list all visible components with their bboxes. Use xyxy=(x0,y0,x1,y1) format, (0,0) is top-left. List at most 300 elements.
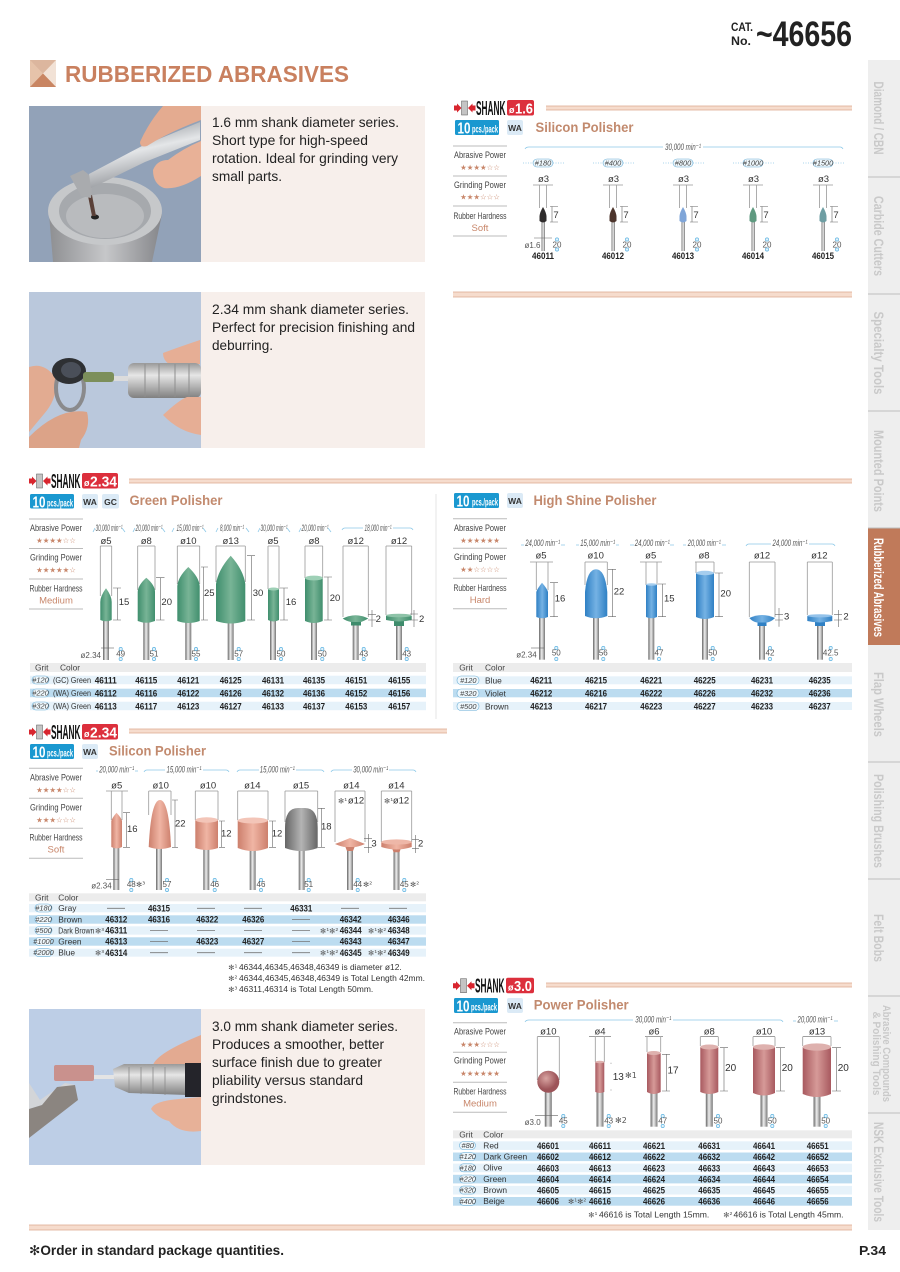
tool 46631: ø8 xyxy=(704,1026,715,1037)
table: silicon polisher part numbers: 46313 xyxy=(105,937,127,948)
table: power polisher part numbers: 46653 xyxy=(807,1163,829,1174)
table: power polisher part numbers: #400 xyxy=(459,1197,477,1206)
photo: handpiece over metal cup xyxy=(29,106,201,262)
tool 46641: ø10 xyxy=(756,1026,772,1037)
table: silicon polisher part numbers: 46311 xyxy=(105,926,128,937)
tool 46014: 46014 xyxy=(742,251,765,262)
tool 46601 xyxy=(525,1026,568,1128)
tool 46346: ø12 xyxy=(393,795,409,806)
tool 46125 xyxy=(216,536,263,661)
tool 46342: ø12 xyxy=(348,795,364,806)
shank logo 2.34: ø xyxy=(84,729,90,739)
speed labels: 8,000 min⁻¹ xyxy=(220,523,244,533)
tool 46641: 50 xyxy=(768,1116,777,1126)
table: power polisher part numbers: 46644 xyxy=(753,1174,776,1185)
table: power polisher part numbers: 46654 xyxy=(807,1174,829,1185)
tool 46012: 7 xyxy=(623,210,629,221)
tool 46331: 51 xyxy=(304,880,314,889)
table: green polisher part numbers: (WA) Green xyxy=(53,701,91,711)
table: green polisher part numbers: 46157 xyxy=(388,702,410,712)
tool 46331 xyxy=(285,781,332,892)
tool 46011: #180 xyxy=(535,158,552,168)
table: power polisher part numbers: 46614 xyxy=(589,1174,612,1185)
table: power polisher part numbers: 46624 xyxy=(643,1174,666,1185)
tool 46211: ø5 xyxy=(535,550,547,561)
section: shank 2.34 silicon polisher xyxy=(29,722,426,994)
page number: P.34 xyxy=(859,1243,887,1258)
footnotes: 46344,46345,46348,46349 is diameter ø12. xyxy=(239,962,402,972)
table: high shine part numbers: Color xyxy=(485,662,505,672)
sidebar navigation tabs: Diamond / CBN xyxy=(871,82,886,154)
product name: Green Polisher xyxy=(130,492,223,508)
photo: power polisher on metal tool xyxy=(29,1009,201,1165)
table: power polisher part numbers: 46632 xyxy=(698,1152,720,1163)
product name: Power Polisher xyxy=(534,996,629,1012)
catalog number: ~46656 xyxy=(756,15,852,54)
table: green polisher part numbers: 46127 xyxy=(220,702,242,712)
speed labels: 20,000 min⁻¹ xyxy=(301,523,328,533)
tool 46326: 12 xyxy=(272,828,282,839)
tool 46631: 20 xyxy=(725,1063,737,1074)
sidebar navigation tabs: Carbide Cutters xyxy=(871,196,886,276)
tool 46014: 7 xyxy=(763,210,769,221)
table: high shine part numbers: 46236 xyxy=(809,688,831,700)
table: high shine part numbers: 46217 xyxy=(585,702,607,712)
table: power polisher part numbers: ✻¹✻² xyxy=(568,1197,586,1206)
WA badge xyxy=(507,998,523,1013)
tool 46621: 47 xyxy=(658,1116,668,1126)
speed labels: 30,000 min⁻¹ xyxy=(635,1014,671,1024)
table: silicon polisher part numbers: 46343 xyxy=(340,937,362,948)
ratings xyxy=(453,519,507,609)
pack badge xyxy=(30,744,74,762)
footnotes: 46616 is Total Length 15mm. xyxy=(599,1210,709,1220)
ratings: Soft xyxy=(48,845,65,856)
tool 46015: 46015 xyxy=(812,251,835,262)
ratings: Grinding Power xyxy=(454,552,506,562)
ratings xyxy=(29,768,83,858)
table: power polisher part numbers: #320 xyxy=(459,1186,477,1195)
tool 46011: 20 xyxy=(553,240,562,250)
ratings xyxy=(453,146,507,236)
table: power polisher part numbers: 46625 xyxy=(643,1186,666,1196)
tool 46221: 47 xyxy=(655,649,664,658)
footnotes xyxy=(228,962,425,994)
tool 46014: ø3 xyxy=(748,174,759,185)
footnotes: ✻¹ xyxy=(588,1211,597,1220)
description text: deburring. xyxy=(212,337,273,353)
table: silicon polisher part numbers: 46345 xyxy=(340,948,362,959)
table: silicon polisher part numbers: ✻¹✻² xyxy=(368,949,386,958)
table: green polisher part numbers: 46155 xyxy=(388,676,411,686)
table: power polisher part numbers: 46642 xyxy=(753,1152,775,1163)
tool 46231 xyxy=(749,550,789,661)
sidebar navigation tabs: NSK Exclusive Tools xyxy=(871,1122,886,1222)
table: power polisher part numbers: Brown xyxy=(483,1185,507,1195)
tool 46601: 45 xyxy=(559,1116,568,1126)
tool 46121: 55 xyxy=(192,650,201,659)
pack badge: pcs./pack xyxy=(472,124,498,136)
tool 46215 xyxy=(585,550,624,661)
tool 46342: 3 xyxy=(371,839,377,850)
tool 46125: 57 xyxy=(234,650,244,659)
tool 46651: 50 xyxy=(821,1116,831,1126)
table: power polisher part numbers: 46641 xyxy=(753,1141,776,1152)
ratings: ★★★☆☆☆ xyxy=(460,192,500,202)
table: high shine part numbers: 46215 xyxy=(585,676,608,686)
ratings: Rubber Hardness xyxy=(454,1086,507,1096)
tool 46013: 46013 xyxy=(672,251,694,262)
sidebar navigation tabs: Specialty Tools xyxy=(871,312,886,394)
table: high shine part numbers: Brown xyxy=(485,702,509,712)
footnotes: ✻² xyxy=(228,974,237,983)
tool 46235: 42.5 xyxy=(823,649,839,658)
description text: grindstones. xyxy=(212,1090,287,1106)
tool 46621 xyxy=(645,1026,679,1128)
table: green polisher part numbers: 46112 xyxy=(95,688,117,700)
table: green polisher part numbers: Grit xyxy=(35,662,49,672)
tool 46342: ✻¹ xyxy=(338,796,347,805)
table: silicon polisher part numbers: Gray xyxy=(58,903,77,913)
ratings: ★★☆☆☆☆ xyxy=(460,565,500,574)
table: high shine part numbers: #500 xyxy=(460,702,477,711)
shank logo 2.34: ø xyxy=(84,478,90,488)
table: power polisher part numbers: 46643 xyxy=(753,1163,775,1174)
panel: 3.0 mm intro xyxy=(29,1009,425,1165)
ratings: Grinding Power xyxy=(454,1056,506,1066)
tool 46631 xyxy=(700,1026,737,1128)
table: silicon polisher part numbers: Dark Brown xyxy=(58,925,95,935)
GC badge: GC xyxy=(104,497,117,507)
table: green polisher part numbers: 46132 xyxy=(262,688,284,700)
table: silicon polisher part numbers: 46344 xyxy=(340,926,362,937)
table: green polisher part numbers: #220 xyxy=(32,688,50,698)
table: power polisher part numbers: 46651 xyxy=(807,1141,829,1152)
table: power polisher part numbers: #180 xyxy=(459,1163,477,1172)
table: power polisher part numbers: 46645 xyxy=(753,1186,776,1196)
table: silicon polisher part numbers: Green xyxy=(58,936,82,946)
tool 46115 xyxy=(138,536,172,661)
tool 46641: 20 xyxy=(782,1063,793,1074)
table: power polisher part numbers: 46631 xyxy=(698,1141,721,1152)
tool 46121 xyxy=(177,536,215,661)
table: high shine part numbers: 46227 xyxy=(694,702,716,712)
speed label: 30,000 min⁻¹ xyxy=(665,142,701,152)
speed labels: 15,000 min⁻¹ xyxy=(166,765,202,775)
ratings xyxy=(29,519,83,609)
table: power polisher part numbers: #220 xyxy=(459,1174,477,1184)
footnotes: 46344,46345,46348,46349 is Total Length 42mm. xyxy=(239,973,425,983)
table: silicon polisher part numbers: #2000 xyxy=(33,948,55,957)
tool 46315: 57 xyxy=(163,880,172,889)
tool 46111: 15 xyxy=(119,597,129,608)
tool 46014: #1000 xyxy=(743,158,764,168)
WA badge: WA xyxy=(508,123,522,133)
table: high shine part numbers: 46226 xyxy=(694,688,716,700)
table: silicon polisher part numbers: 46348 xyxy=(388,926,410,937)
speed labels xyxy=(93,523,413,533)
ratings: Abrasive Power xyxy=(454,150,506,160)
tool 46342: 44 xyxy=(353,880,363,889)
section: high shine polisher xyxy=(453,492,852,712)
pack badge: 10 xyxy=(456,494,470,510)
table: green polisher part numbers: 46126 xyxy=(220,688,242,700)
tool 46211: 50 xyxy=(552,649,561,658)
sidebar navigation tabs: & Polishing Tools xyxy=(870,1012,882,1096)
tool 46115: 20 xyxy=(161,597,172,608)
catalog number xyxy=(731,15,852,54)
tool 46331: ø15 xyxy=(293,781,309,792)
tool 46641 xyxy=(753,1026,793,1128)
ratings: ★★★☆☆☆ xyxy=(460,1040,500,1049)
shank logo 3.0: 3.0 xyxy=(514,978,532,995)
table: high shine part numbers: 46212 xyxy=(530,688,552,700)
WA badge xyxy=(507,493,523,508)
tool 46155: ø12 xyxy=(391,536,407,547)
tool 46111: ø2.34 xyxy=(81,651,102,660)
pack badge xyxy=(454,998,498,1016)
ratings: ★★★☆☆☆ xyxy=(36,815,76,824)
tool 46221: ø5 xyxy=(645,550,656,561)
table: silicon polisher part numbers: 46315 xyxy=(148,903,171,914)
product name: Silicon Polisher xyxy=(109,743,207,759)
description text: 3.0 mm shank diameter series. xyxy=(212,1018,398,1034)
speed labels: 20,000 min⁻¹ xyxy=(797,1014,832,1024)
WA badge: WA xyxy=(83,747,97,757)
tool 46135: 50 xyxy=(318,650,327,659)
table: power polisher part numbers: 46633 xyxy=(698,1163,720,1174)
speed labels: 15,000 min⁻¹ xyxy=(176,523,204,533)
table: green polisher part numbers: 46135 xyxy=(303,676,326,686)
table: silicon polisher part numbers: 46346 xyxy=(388,914,410,926)
tool 46211: ø2.34 xyxy=(516,651,537,660)
tool 46013 xyxy=(663,158,705,262)
table: green polisher part numbers xyxy=(30,662,426,712)
table: silicon polisher part numbers: ✻¹✻² xyxy=(320,949,338,958)
tool 46331: 18 xyxy=(321,822,332,833)
tool 46611: 43 xyxy=(604,1116,614,1126)
tool 46151: 2 xyxy=(376,614,381,625)
tool 46231: 3 xyxy=(784,611,789,622)
ratings: Rubber Hardness xyxy=(30,832,83,842)
tool 46326: 46 xyxy=(257,880,266,889)
footnotes: ✻¹ xyxy=(228,963,237,972)
tool 46015: 20 xyxy=(833,240,842,250)
panel: 2.34 mm intro xyxy=(29,292,425,448)
table: silicon polisher part numbers: #180 xyxy=(35,904,53,912)
WA badge xyxy=(507,120,523,135)
footnotes xyxy=(588,1210,844,1220)
table: power polisher part numbers: Beige xyxy=(483,1196,505,1206)
catalog number: CAT. xyxy=(731,20,753,34)
table: high shine part numbers: 46237 xyxy=(809,702,831,712)
ratings: ★★★★★★ xyxy=(460,1069,500,1078)
section: shank 3.0 power polisher xyxy=(453,976,852,1220)
ratings: Abrasive Power xyxy=(454,1026,506,1036)
ratings: Grinding Power xyxy=(30,552,82,562)
table: silicon polisher part numbers: ✻¹✻² xyxy=(368,926,386,936)
tool 46015 xyxy=(803,158,845,262)
sidebar navigation tabs xyxy=(868,60,900,1230)
sidebar navigation tabs: Rubberized Abrasives xyxy=(871,538,886,637)
ratings: Grinding Power xyxy=(454,180,506,190)
tool 46322 xyxy=(195,781,232,892)
tool 46311: 48 xyxy=(127,880,136,889)
table: silicon polisher part numbers: 46327 xyxy=(242,937,264,948)
tool 46215: 22 xyxy=(614,587,624,598)
table: green polisher part numbers: (GC) Green xyxy=(53,675,91,685)
table: high shine part numbers: Blue xyxy=(485,676,502,686)
tool 46111: 49 xyxy=(116,650,126,659)
table: power polisher part numbers: Grit xyxy=(459,1130,473,1140)
table: power polisher part numbers: 46601 xyxy=(537,1141,560,1152)
speed labels: 30,000 min⁻¹ xyxy=(353,765,388,775)
tool 46013: 20 xyxy=(693,240,702,250)
tool 46125: 30 xyxy=(253,588,263,599)
tool 46315: 22 xyxy=(175,819,186,830)
tool 46311: ø2.34 xyxy=(91,882,112,891)
ratings: Soft xyxy=(472,223,489,234)
table: power polisher part numbers: 46615 xyxy=(589,1186,612,1196)
tool 46611: ✻2 xyxy=(615,1116,627,1125)
ratings: Medium xyxy=(463,1099,497,1110)
table: silicon polisher part numbers: 46322 xyxy=(196,914,218,926)
tool 46011: 46011 xyxy=(532,251,555,262)
description text: pliability versus standard xyxy=(212,1072,363,1088)
table: silicon polisher part numbers xyxy=(29,892,426,959)
table: power polisher part numbers: 46652 xyxy=(807,1152,829,1163)
table: high shine part numbers: Grit xyxy=(459,662,473,672)
ratings: ★★★★☆☆ xyxy=(36,536,76,545)
tool 46326: ø14 xyxy=(244,781,260,792)
speed labels xyxy=(525,1014,838,1024)
tool 46611: ✻1 xyxy=(625,1071,637,1080)
table: power polisher part numbers: 46613 xyxy=(589,1163,611,1174)
table: silicon polisher part numbers: 46312 xyxy=(105,914,127,926)
table: green polisher part numbers: #320 xyxy=(32,702,50,710)
table: green polisher part numbers: 46123 xyxy=(177,702,199,712)
tool 46115: 51 xyxy=(150,650,159,659)
table: green polisher part numbers: 46137 xyxy=(303,702,325,712)
table: silicon polisher part numbers: Blue xyxy=(58,948,75,958)
tool 46342: ø14 xyxy=(343,781,359,792)
table: silicon polisher part numbers: ✻³ xyxy=(95,949,104,958)
pack badge: 10 xyxy=(456,998,470,1016)
table: silicon polisher part numbers: 46316 xyxy=(148,914,170,926)
tool 46342: ✻² xyxy=(363,880,372,889)
tool 46013: 7 xyxy=(693,210,699,221)
table: green polisher part numbers: 46131 xyxy=(262,676,285,686)
sidebar navigation tabs: Mounted Points xyxy=(871,430,886,512)
tool 46155: 2 xyxy=(419,614,424,625)
speed labels: 20,000 min⁻¹ xyxy=(99,765,134,775)
table: high shine part numbers: 46223 xyxy=(640,702,662,712)
tool 46221: 15 xyxy=(664,594,675,605)
table: silicon polisher part numbers: 46331 xyxy=(290,903,313,914)
description text: 2.34 mm shank diameter series. xyxy=(212,301,409,317)
table: high shine part numbers: 46232 xyxy=(751,688,773,700)
tool 46315: ø10 xyxy=(153,781,169,792)
shank logo 1.6: SHANK xyxy=(476,98,506,120)
pack badge xyxy=(30,494,74,511)
tool 46211 xyxy=(516,550,565,661)
table: green polisher part numbers: #120 xyxy=(32,676,50,684)
table: high shine part numbers: 46221 xyxy=(640,676,663,686)
shank logo 2.34: 2.34 xyxy=(90,474,118,490)
table: high shine part numbers: 46233 xyxy=(751,702,773,712)
tool 46322: 12 xyxy=(221,828,232,839)
table: high shine part numbers: 46231 xyxy=(751,676,774,686)
ratings xyxy=(453,1023,507,1112)
shank logo 1.6: ø xyxy=(509,105,515,115)
shank logo 1.6: 1.6 xyxy=(515,100,533,118)
tool 46131: 16 xyxy=(286,597,296,608)
tool 46322: 46 xyxy=(210,880,220,889)
pack badge: pcs./pack xyxy=(472,496,498,508)
table: power polisher part numbers: 46603 xyxy=(537,1163,559,1174)
tool 46215: 56 xyxy=(599,649,608,658)
tool 46012: #400 xyxy=(605,158,622,168)
tool 46231: ø12 xyxy=(754,550,770,561)
speed labels: 30,000 min⁻¹ xyxy=(96,523,122,533)
ratings: Abrasive Power xyxy=(30,772,82,782)
table: power polisher part numbers xyxy=(453,1130,852,1208)
tool 46326 xyxy=(238,781,282,892)
table: silicon polisher part numbers: 46342 xyxy=(340,914,362,926)
table: high shine part numbers: 46213 xyxy=(530,702,552,712)
WA badge xyxy=(82,744,98,759)
tool 46346: 45 xyxy=(400,880,409,889)
table: silicon polisher part numbers: 46323 xyxy=(196,937,218,948)
tool 46235 xyxy=(807,550,849,661)
table: power polisher part numbers: 46612 xyxy=(589,1152,611,1163)
tool 46015: ø3 xyxy=(818,174,829,185)
speed labels: 24,000 min⁻¹ xyxy=(772,538,808,548)
speed labels: 20,000 min⁻¹ xyxy=(135,523,162,533)
tool 46611 xyxy=(589,1026,637,1128)
table: power polisher part numbers: 46656 xyxy=(807,1197,829,1208)
pack badge: pcs./pack xyxy=(471,1002,497,1014)
tool 46611: ø4 xyxy=(594,1026,606,1037)
tool 46115: ø8 xyxy=(141,536,152,547)
shank logo 2.34: SHANK xyxy=(51,722,81,744)
speed labels xyxy=(96,765,416,775)
description text: Perfect for precision finishing and xyxy=(212,319,415,335)
table: green polisher part numbers: 46152 xyxy=(345,688,367,700)
table: green polisher part numbers: 46117 xyxy=(135,702,157,712)
shank logo 2.34: 2.34 xyxy=(90,724,118,742)
tool 46012: ø3 xyxy=(608,174,619,185)
table: power polisher part numbers: 46604 xyxy=(537,1174,560,1185)
description text: small parts. xyxy=(212,168,282,184)
tool 46225: 50 xyxy=(708,649,718,658)
footnotes: 46616 is Total Length 45mm. xyxy=(734,1210,844,1220)
table: power polisher part numbers: 46605 xyxy=(537,1186,560,1196)
tool 46346: 2 xyxy=(418,839,423,850)
tool 46235: ø12 xyxy=(811,550,827,561)
photo: green polisher finishing a ring xyxy=(29,292,201,448)
table: silicon polisher part numbers: #220 xyxy=(35,915,53,924)
table: power polisher part numbers: 46606 xyxy=(537,1197,559,1208)
speed labels: 30,000 min⁻¹ xyxy=(260,523,288,533)
tool 46135: 20 xyxy=(330,593,340,604)
table: high shine part numbers: #320 xyxy=(460,689,477,698)
table: high shine part numbers: #120 xyxy=(460,676,477,685)
ratings: Rubber Hardness xyxy=(30,584,83,594)
table: green polisher part numbers: 46116 xyxy=(135,688,157,700)
table: power polisher part numbers: 46634 xyxy=(698,1174,721,1185)
pack badge: 10 xyxy=(458,120,471,138)
